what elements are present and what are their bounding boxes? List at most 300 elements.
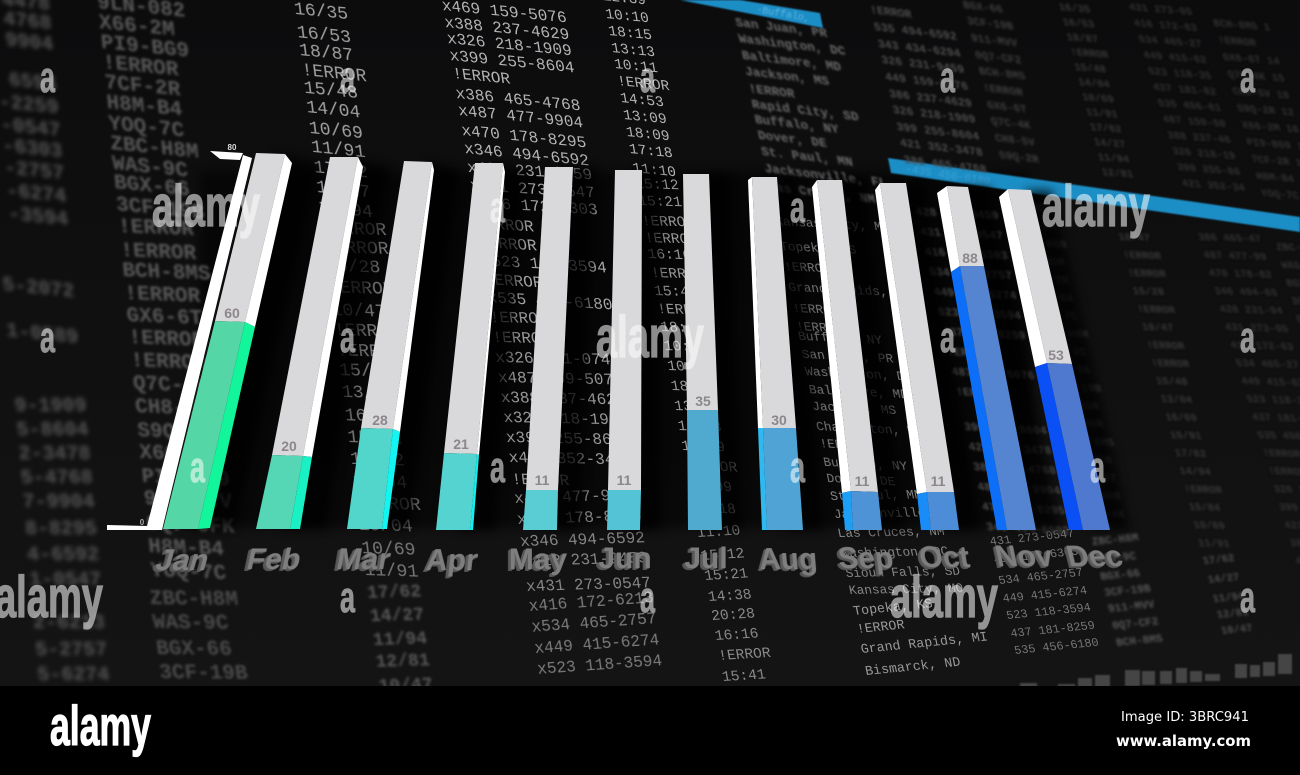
data column: extensions and phone numbers: x421 352-3478 xyxy=(508,449,635,469)
bar: Sep 11: 11 xyxy=(855,473,870,489)
data column: error codes: !ERROR xyxy=(119,239,198,266)
data column: extensions and phone numbers: x431 273-0547 xyxy=(469,177,596,202)
data column: extensions and phone numbers: x487 159-5076 xyxy=(497,369,624,389)
data column: error codes: ZBC-H8M xyxy=(148,587,240,612)
data column: blurred numbers far right: 346 494-65 xyxy=(1213,286,1279,300)
data column: cities: Baltimore, MD xyxy=(807,382,910,402)
data column: blurred codes right: BGX-66 xyxy=(962,0,1005,17)
month labels: May xyxy=(509,543,567,576)
data column: error codes: BGX-66 xyxy=(113,171,191,203)
data column: blurred phone numbers right: 421 352-3478 xyxy=(967,441,1053,458)
data column: lower phone numbers right: 416 172-6303 xyxy=(992,545,1080,567)
data column: blurred phone numbers right: 535 494-6592 xyxy=(873,20,958,44)
data column: error codes: 7CF-2R xyxy=(104,71,182,103)
data column: times: 15:41 xyxy=(653,284,700,301)
data column: blurred dates right: 16/53 xyxy=(1061,17,1096,31)
data column: blurred codes right: X66-2M xyxy=(1015,220,1058,234)
data column: times: 13:09 xyxy=(622,108,668,128)
data column: error codes: 3CF-19B xyxy=(115,193,206,226)
data column: dates: !ERROR xyxy=(328,278,395,300)
data column: blurred phone numbers right: 386 237-4629 xyxy=(888,87,973,111)
data column: blurred codes right: BCH-8MS xyxy=(978,66,1027,84)
chart axis with tick labels: 80 xyxy=(228,143,237,152)
data column: extensions and phone numbers: x416 172-6213 xyxy=(528,589,655,616)
data column: cities: Washington, DC xyxy=(840,544,950,561)
data column: blurred codes right: 911-MVV xyxy=(970,33,1019,51)
watermarks: a xyxy=(790,443,805,492)
data column: blurred dates right: !ERROR xyxy=(1122,250,1163,263)
small bar strip, bottom right xyxy=(1020,654,1292,687)
data column: error codes: GX6-6T xyxy=(126,304,203,331)
data column: extensions and phone numbers: x431 273-0547 xyxy=(525,574,652,596)
data column: dates: 14/27 xyxy=(315,178,372,203)
data column: extensions and phone numbers: x386 465-4768 xyxy=(454,85,582,115)
bar: Jun 11 xyxy=(607,170,642,530)
data column: dates: 15/04 xyxy=(358,516,414,538)
data column: error codes: CH8-5V xyxy=(134,395,212,422)
data column: times: 16:16 xyxy=(646,247,693,264)
data column: blurred phone numbers right: 416 172-6303 xyxy=(923,246,1009,263)
data column: times: !ERROR xyxy=(656,302,711,320)
bar: Oct 11: 11 xyxy=(931,473,946,489)
data column: blurred phone numbers right: 343 434-6294 xyxy=(876,37,962,61)
data column: blurred codes right: 0Q7-CF2 xyxy=(974,50,1023,68)
data column: blurred phone numbers right: 431 273-0547 xyxy=(919,226,1005,243)
data column: blurred numbers far right: 416 172-63 xyxy=(1229,340,1295,354)
data column: blurred numbers far right: 428 231-94 xyxy=(1218,304,1285,318)
data column: blurred phone numbers right: 449 159-5076 xyxy=(884,70,970,94)
data column: blurred dates right: 14/94 xyxy=(1178,466,1213,479)
data column: cities: Buffalo, NY xyxy=(753,112,840,137)
data column: phone numbers far left: 5-6274 xyxy=(36,664,110,687)
data column: blurred dates right: !ERROR xyxy=(1150,358,1192,371)
data column: extensions and phone numbers: x535 456-6180 xyxy=(486,289,614,314)
data column: blurred codes right: !ERROR xyxy=(1062,418,1105,432)
watermarks: a xyxy=(490,183,505,232)
data column: blurred dates right xyxy=(1058,2,1255,638)
data column: blurred dates right: 10/69 xyxy=(1081,92,1116,106)
data column: blurred codes right: !ERROR xyxy=(1023,256,1066,270)
data column: dates: 16/53 xyxy=(296,23,352,48)
watermarks: a xyxy=(490,443,505,492)
data column: lower phone numbers right: 535 456-6180 xyxy=(1013,636,1100,658)
data column: blurred codes right: WAS-9C xyxy=(1045,346,1088,360)
data column: blurred numbers far right: 470 178-82 xyxy=(1207,268,1274,282)
data column: dates: 15/48 xyxy=(303,79,359,104)
data column: times: 16:16 xyxy=(714,626,760,645)
data column: dates: 10/69 xyxy=(308,119,364,144)
data column: times: 14:53 xyxy=(619,91,665,111)
bar: Aug 30: 30 xyxy=(771,412,787,428)
data column: blurred codes right: BGX-66 xyxy=(1099,568,1142,584)
data column: extensions and phone numbers: x326 218-1909 xyxy=(446,30,573,60)
data column: extensions and phone numbers: x449 415-6274 xyxy=(533,631,661,658)
data column: blurred codes right: !ERROR xyxy=(982,83,1025,100)
data column: blurred numbers far right: S9Q-2R 12 xyxy=(1236,103,1296,119)
data column: blurred dates right: !ERROR xyxy=(1136,304,1177,317)
data column: blurred phone numbers right: 437 181-8259 xyxy=(941,326,1027,343)
data column: blurred phone numbers right: 534 465-2757 xyxy=(928,266,1014,283)
data column: blurred phone numbers right: !ERROR xyxy=(946,346,990,361)
data column: dates: !ERROR xyxy=(320,219,388,241)
data column: blurred dates right: !ERROR xyxy=(1069,47,1111,62)
data column: dates: 10/47 xyxy=(331,301,387,323)
data column: blurred codes right: 7CF-2R xyxy=(1028,274,1071,288)
data column: phone numbers far left: 5-2757 xyxy=(34,639,108,662)
data column: phone numbers far left: 1-0589 xyxy=(5,320,79,350)
data column: cities: Washington, DC xyxy=(804,364,914,384)
data column: cities: Rapid City, SD xyxy=(750,97,860,125)
data column: error codes: !ERROR xyxy=(117,215,195,242)
data column: cities: !ERROR xyxy=(747,81,796,101)
data column: dates: 16/35 xyxy=(293,0,349,25)
data column: blurred numbers far right: 431 273-05 xyxy=(1224,322,1290,336)
data column: blurred numbers far right: 386 465-47 xyxy=(1197,232,1263,246)
data column: blurred phone numbers right: !ERROR xyxy=(955,386,999,401)
data column: blurred dates right: 14/27 xyxy=(1207,572,1241,587)
data column: dates: 15/91 xyxy=(347,428,403,450)
data column: blurred dates right: 16/35 xyxy=(1058,2,1092,16)
data column: blurred codes right: H8M-B4 xyxy=(1032,292,1075,306)
blue highlight row, top: -Buffalo, xyxy=(755,4,811,25)
data column: cities: Jacksonville, FL xyxy=(832,505,957,522)
data column: cities: San Juan, PR xyxy=(800,347,895,367)
data column: blurred codes right: 911-MVV xyxy=(1107,599,1156,616)
image id: Image ID: 3BRC941 xyxy=(1121,710,1249,725)
data column: blurred codes right: Q7C-4K xyxy=(990,116,1033,133)
data column: times: 15:12 xyxy=(634,177,680,194)
watermarks: a xyxy=(640,53,655,102)
month labels: Oct xyxy=(917,541,972,574)
data column: blurred phone numbers right: 470 178-8295 xyxy=(981,501,1066,518)
bar: Feb 20: 20 xyxy=(281,438,297,454)
data column: cities: Dover, DE xyxy=(757,128,828,151)
bar: Oct 11 xyxy=(875,183,959,530)
data column: blurred numbers far right: 326 218-19 xyxy=(1171,146,1237,163)
data column: blurred codes right: 3CF-19B xyxy=(966,16,1015,34)
data column: blurred phone numbers right: 421 352-3478 xyxy=(899,136,984,160)
data column: dates: 18/87 xyxy=(298,41,355,66)
footer logo: alamy xyxy=(50,694,151,757)
data column: extensions and phone numbers: !ERROR xyxy=(451,65,512,89)
data column: extensions and phone numbers: x326 181-0746 xyxy=(494,349,621,369)
data column: blurred phone numbers right: 487 477-9904 xyxy=(976,481,1062,498)
data column: times xyxy=(601,0,776,686)
data column: dates: 17/62 xyxy=(366,582,422,604)
data column: extensions and phone numbers: !ERROR xyxy=(478,234,538,255)
bar: May 11: 11 xyxy=(535,472,550,488)
data column: dates: 14/94 xyxy=(352,472,408,494)
month labels xyxy=(152,539,1126,577)
data column: blurred codes right: !ERROR xyxy=(1058,400,1101,414)
data column: extensions and phone numbers: x487 477-9904 xyxy=(513,486,640,508)
data column: blurred numbers far right: 534 465-27 xyxy=(1137,34,1204,51)
watermarks: a xyxy=(340,573,355,622)
watermarks: a xyxy=(790,183,805,232)
watermarks: a xyxy=(940,313,955,362)
data column: error codes: H8M-B4 xyxy=(147,535,225,562)
data column: blurred codes right: BCH-8MS xyxy=(1115,633,1164,650)
data column: blurred phone numbers right: 487 159-5076 xyxy=(950,366,1036,383)
bar: Apr 21: 21 xyxy=(453,436,469,452)
data column: dates: 10/69 xyxy=(360,539,417,561)
data column: dates: 12/81 xyxy=(375,651,431,673)
data column: extensions and phone numbers: x388 237-4629 xyxy=(500,389,627,409)
bar: Nov 88 xyxy=(937,186,1036,530)
data column: times: 18:41 xyxy=(659,320,706,337)
data column: blurred numbers far right xyxy=(1128,2,1300,570)
watermarks: a xyxy=(1090,443,1105,492)
data column: blurred codes right: !ERROR xyxy=(1011,202,1053,216)
data column: blurred codes right: 3CF-19B xyxy=(1054,382,1103,396)
bar: Sep 11 xyxy=(812,180,882,530)
data column: cities: !ERROR xyxy=(783,259,832,276)
data column: blurred codes right: GX6-6T xyxy=(986,100,1029,117)
data column: extensions and phone numbers: x399 255-8604 xyxy=(448,47,576,77)
data column: times: 15:12 xyxy=(700,546,746,565)
data column: dates: 14/27 xyxy=(369,605,425,627)
data column: phone numbers far left: 9904 xyxy=(4,29,54,57)
bar: Jan 60: 60 xyxy=(224,305,240,321)
bar: Aug 30 xyxy=(748,177,803,530)
data column: blurred dates right: 12/81 xyxy=(1216,607,1250,622)
data column: blurred codes right: ZBC-H8M xyxy=(1091,532,1140,549)
data column: dates: 11/94 xyxy=(372,629,429,651)
month labels: Dec xyxy=(1063,539,1126,573)
data column: blurred phone numbers right xyxy=(869,3,1071,538)
data column: dates: 15/94 xyxy=(318,198,374,223)
bar: May 11 xyxy=(523,167,573,530)
data column: blurred codes right: 3CF-19B xyxy=(1103,583,1152,600)
bar: Mar 28: 28 xyxy=(372,412,388,428)
month labels: Feb xyxy=(244,543,304,576)
month labels: Mar xyxy=(334,543,393,576)
data column: phone numbers far left: 5-8604 xyxy=(16,419,90,442)
data column: times: 18:09 xyxy=(625,125,671,145)
watermarks: alamy xyxy=(890,565,998,630)
data column: blurred codes right: Q7C-4K xyxy=(1084,508,1127,522)
bar: Mar 28 xyxy=(347,161,434,529)
data column: error codes: H8M-B4 xyxy=(106,91,184,123)
footer strip xyxy=(0,686,1300,775)
data column: error codes: 3CF-19B xyxy=(158,661,250,686)
data column: extensions and phone numbers: x346 494-6592 xyxy=(519,529,646,551)
data column: blurred dates right: 10/69 xyxy=(1192,520,1227,533)
data column: times: 13:13 xyxy=(673,399,720,416)
data column: cities: Jackson, MS xyxy=(744,64,831,89)
data column: phone numbers far left: -2757 xyxy=(3,157,65,186)
data column: cities: San Juan, PR xyxy=(734,15,829,41)
data column: blurred numbers far right: 534 465-27 xyxy=(1234,358,1300,372)
watermarks: alamy xyxy=(152,174,260,239)
bar: Jun 11: 11 xyxy=(617,472,632,488)
data column: times: !ERROR xyxy=(644,231,699,249)
data column: blurred numbers far right: 431 273-05 xyxy=(1128,2,1194,19)
watermarks: alamy xyxy=(596,305,704,370)
data column: times: 11:10 xyxy=(631,161,678,181)
data column: blurred numbers far right: GX6-6T 14 xyxy=(1222,52,1282,68)
data column: dates xyxy=(293,0,434,697)
data column: extensions and phone numbers: x388 237-4629 xyxy=(443,14,571,44)
data column: extensions and phone numbers xyxy=(441,0,663,679)
data column: blurred codes right: !ERROR xyxy=(1071,454,1114,468)
data column: error codes: X66-2M xyxy=(138,441,216,468)
data column: blurred numbers far right: 399 255-86 xyxy=(1176,162,1242,179)
data column: times: 14:38 xyxy=(707,587,753,606)
data column: times: !ERROR xyxy=(641,214,696,232)
data column: error codes: S9Q-2R xyxy=(136,419,215,446)
data column: times: !ERROR xyxy=(684,459,739,477)
month labels: Jun xyxy=(598,542,652,575)
data column: dates: 17/62 xyxy=(313,158,369,183)
data column: error codes: WAS-9C xyxy=(111,152,189,184)
data column: phone numbers far left: -6303 xyxy=(2,135,64,164)
data column: lower phone numbers right xyxy=(988,527,1100,658)
data column: cities: Kansas City, MO xyxy=(774,214,891,235)
data column: times: !ERROR xyxy=(650,266,705,284)
data column: dates: 10/47 xyxy=(378,675,434,697)
month labels: Nov xyxy=(992,540,1056,573)
data column: times: 15:41 xyxy=(721,667,767,686)
data column: blurred dates right: 11/94 xyxy=(1211,591,1247,606)
data column: error codes: WAS-9C xyxy=(151,611,230,636)
data column: cities: Grand Rapids, MI xyxy=(787,280,912,301)
data column: extensions and phone numbers: !ERROR xyxy=(489,309,549,328)
bar: Nov 88: 88 xyxy=(962,250,978,266)
data column: blurred phone numbers right: 523 118-3594 xyxy=(937,306,1023,323)
data column: lower phone numbers right: 431 273-0547 xyxy=(988,527,1076,549)
data column: blurred numbers far right: 388 237-46 xyxy=(1166,130,1233,147)
data column: blurred dates right: 12/81 xyxy=(1100,167,1135,181)
data column: times: 14:53 xyxy=(677,419,723,436)
data column: cities: !ERROR xyxy=(795,319,844,336)
data column: dates: 16/69 xyxy=(344,406,400,428)
data column: blurred codes right: YOQ-7C xyxy=(1036,310,1079,324)
data column: cities: Grand Rapids, MI xyxy=(860,630,989,658)
watermarks: a xyxy=(1240,573,1255,622)
data column: blurred dates right: 17/62 xyxy=(1089,122,1123,136)
data column: blurred codes right: CH8-5V xyxy=(994,133,1037,150)
data column: cities: Las Cruces, NM xyxy=(836,524,946,541)
data column: times: 11:10 xyxy=(696,523,742,542)
watermarks: a xyxy=(40,313,55,362)
data column: cities: Las Cruces, NM xyxy=(767,179,877,207)
data column: extensions and phone numbers: !ERROR xyxy=(475,215,536,236)
data column: blurred numbers far right: 535 456-61 xyxy=(1156,98,1223,115)
data column: blurred numbers far right: 487 477-99 xyxy=(1202,250,1268,264)
data column: lower phone numbers right: 534 465-2757 xyxy=(997,566,1084,588)
bar: Jul 35 xyxy=(683,174,722,530)
data column: times: 20:28 xyxy=(710,606,756,625)
data column: extensions and phone numbers: x523 118-3594 xyxy=(481,252,608,277)
data column: times: 15:21 xyxy=(637,194,684,211)
data column: times: 17:18 xyxy=(628,142,674,162)
data column: blurred phone numbers right: 449 415-6274 xyxy=(932,286,1018,303)
data column: blurred phone numbers right: 386 465-4768 xyxy=(972,461,1057,478)
data column: dates: !ERROR xyxy=(333,321,401,343)
data column: blurred codes right: BCH-8MS xyxy=(1067,436,1116,450)
data column: extensions and phone numbers: x399 255-8604 xyxy=(505,429,632,449)
data column: blurred dates right: 10/47 xyxy=(1141,322,1175,335)
chart axis with tick labels: 0 xyxy=(140,518,145,527)
watermarks: a xyxy=(40,53,55,102)
data column: blurred numbers far right: 437 181-82 xyxy=(1152,82,1218,99)
data column: blurred codes right: WAS-9C xyxy=(1095,551,1138,567)
chart axis with tick labels xyxy=(107,143,253,530)
data column: times: 10:11 xyxy=(666,359,713,376)
data column: blurred dates right: 11/94 xyxy=(1097,152,1132,166)
data column: cities: St. Paul, MN xyxy=(829,487,923,504)
data column: blurred dates right: 13/04 xyxy=(1159,394,1195,407)
data column: dates: 17/62 xyxy=(349,450,406,472)
data column: blurred codes right: ZBC-H8M xyxy=(1041,328,1090,342)
month labels: Apr xyxy=(424,544,480,577)
data column: cities: Jackson, MS xyxy=(811,399,898,418)
data column: dates: !ERROR xyxy=(336,341,403,363)
bar: Jan 60 xyxy=(163,153,292,529)
data column: blurred dates right: 15/28 xyxy=(1131,286,1166,299)
data column: blurred dates right: 18/87 xyxy=(1065,32,1100,46)
data column: cities: St. Paul, MN xyxy=(760,144,854,170)
watermarks: a xyxy=(940,53,955,102)
data column: cities: Bismarck, ND xyxy=(864,656,962,680)
data column: phone numbers far left: 2-3478 xyxy=(18,443,92,466)
watermarks: a xyxy=(190,443,205,492)
data column: blurred dates right: !ERROR xyxy=(1145,340,1187,353)
month labels: Jul xyxy=(684,542,728,575)
data column: phone numbers far left: 2-6213 xyxy=(32,612,106,635)
data column: error codes: YOQ-7C xyxy=(108,112,186,144)
data column: blurred dates right: 15/48 xyxy=(1073,62,1108,76)
data column: extensions and phone numbers: x534 465-2757 xyxy=(531,610,658,637)
data column: blurred dates right: !ERROR xyxy=(1127,268,1168,281)
data column: error codes: BGX-66 xyxy=(155,637,234,662)
data column: blurred numbers far right: 421 352-34 xyxy=(1180,178,1248,195)
data column: blurred codes right: GX6-6T xyxy=(1075,472,1118,486)
month labels: Sep xyxy=(836,542,895,575)
data column: times: !ERROR xyxy=(616,74,671,95)
data column: error codes: BCH-8MS xyxy=(121,259,212,287)
data column: times: 10:10 xyxy=(663,339,709,356)
data column: blurred codes right: 0Q7-CF2 xyxy=(1111,616,1160,633)
data column: error codes: 911-MVV xyxy=(143,487,234,515)
data column: cities: Kansas City, MO xyxy=(848,581,965,598)
data column: phone numbers far left: -3594 xyxy=(7,203,69,232)
data column: times: 18:15 xyxy=(670,379,716,396)
data column: dates: !ERROR xyxy=(323,238,390,260)
site url: www.alamy.com xyxy=(1116,732,1251,750)
bar: Apr 21 xyxy=(436,163,505,530)
data column: extensions and phone numbers: x326 218-1909 xyxy=(502,409,629,429)
data column: blurred phone numbers right: 326 231-9459 xyxy=(880,53,966,77)
data column: times: 18:15 xyxy=(607,24,653,44)
data column: error codes: Q7C-4K xyxy=(132,372,210,399)
data column: extensions and phone numbers: x487 477-9904 xyxy=(457,102,585,132)
data column: phone numbers far left: 9-1909 xyxy=(14,395,88,418)
data column: blurred dates right: 15/04 xyxy=(1188,502,1223,515)
data column: cities: Buffalo, NY xyxy=(797,329,884,348)
data column: dates: 13/04 xyxy=(341,383,397,405)
data column: blurred dates right: 14/04 xyxy=(1077,77,1112,91)
watermarks: a xyxy=(340,53,355,102)
data column: blurred phone numbers right: 386 465-4768 xyxy=(902,153,988,177)
data column: error codes: !ERROR xyxy=(130,349,208,376)
blue highlight row, top xyxy=(680,0,823,28)
data column: times: 13:09 xyxy=(680,439,727,456)
data column: times: 18:09 xyxy=(687,479,734,496)
data column: times: 10:10 xyxy=(604,7,650,27)
data column: error codes: 0Q7-CFK xyxy=(145,512,236,540)
